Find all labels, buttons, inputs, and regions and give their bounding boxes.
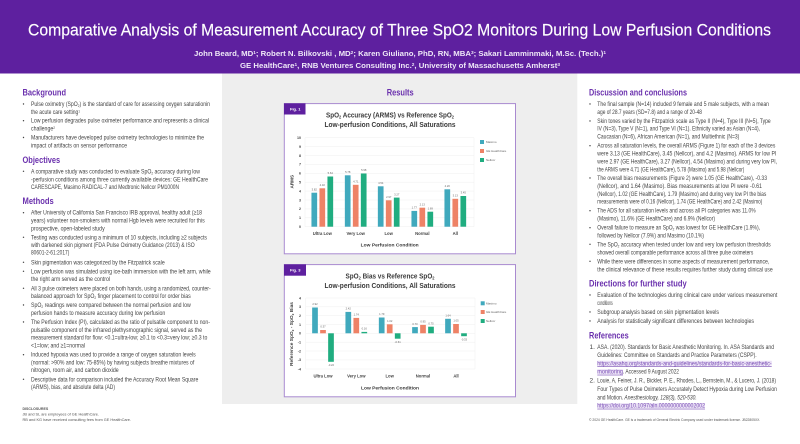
affiliations: , University of Massachusetts Amherst <box>414 61 558 70</box>
bar chart: ARMS: 1 <box>299 216 301 220</box>
bar chart: ARMS: Very Low <box>347 231 366 236</box>
bar chart: ARMS: 5.98 <box>361 168 367 172</box>
bar chart: bias: 0 <box>299 332 301 336</box>
heading: discussion and conclusions: Discussion and conclusions <box>589 87 687 97</box>
bar chart: bias: Bias <box>289 302 294 314</box>
bar chart: bias: 1.74 <box>354 313 359 317</box>
chart title <box>324 110 456 129</box>
bar chart: bias: -3 <box>298 358 301 362</box>
text block: methods bullets: All 3 pulse oximeters were placed on both hands, using a randomized, counter- <box>31 285 211 292</box>
text block: directions bullets: Subgroup analysis based on skin pigmentation levels <box>597 309 720 316</box>
chart title: Bias vs Reference SpO <box>361 272 433 281</box>
bar chart: ARMS: 4.32 <box>320 183 325 187</box>
bar chart: bias: 1.79 <box>379 312 385 316</box>
text block: methods bullets: finger placement to control for order bias <box>96 293 191 300</box>
affiliations: , RNB Ventures Consulting Inc. <box>297 61 412 70</box>
text block: methods bullets: the right arm served as the control <box>31 276 110 283</box>
text block: methods bullets: years) volunteer non-smokers with normal Hgb levels were recruited for this <box>31 218 205 225</box>
text block: objectives bullet <box>23 168 208 191</box>
bar chart: ARMS: 0 <box>299 225 301 229</box>
bar chart: bias: Ultra Low <box>313 374 333 378</box>
bar chart: ARMS: 2 <box>299 207 301 211</box>
authors: ; Robert N. Bilkovski , MD <box>256 49 351 58</box>
bar chart: bias: 1 <box>299 323 301 327</box>
bar chart: ARMS: Low Perfusion Condition <box>361 243 419 248</box>
text block: objectives bullet: CARESCAPE, Masimo RADICAL-7 and Medtronic Nellcor PM1000N <box>31 184 179 191</box>
bar chart: bias: 1.64 <box>445 314 451 318</box>
text block: discussion bullets: Caucasian (N=6), African American (N=1), and Multiethnic (N=3) <box>597 134 739 141</box>
text block: discussion bullets: The ADS for all saturation levels and across all PI categories was 11.0% <box>597 208 756 215</box>
chart title: SpO <box>326 110 341 119</box>
text block: background bullets: 2 <box>53 125 56 130</box>
text block: methods bullets: Induced hypoxia was used to provide a range of oxygen saturation levels <box>31 352 196 359</box>
text block: background bullets: 1 <box>78 108 81 114</box>
disclosures <box>22 407 131 422</box>
figure tag 3: Fig. 3 <box>290 267 301 272</box>
heading: references: References <box>589 330 629 340</box>
bar chart: ARMS: 5.78 <box>345 170 351 174</box>
text block: methods bullets: SpO <box>31 302 44 309</box>
bar chart: bias: - SpO <box>289 315 294 330</box>
bar chart: ARMS: 2.97 <box>386 195 392 199</box>
bar chart: bias: All <box>453 374 459 378</box>
bar chart: ARMS: Normal <box>415 231 430 236</box>
chart legend <box>481 301 507 323</box>
text block: background bullets: Pulse oximetry (SpO <box>31 101 91 108</box>
text block: discussion bullets: was lowest for GE HealthCare (1.9%), <box>674 225 760 232</box>
panel: figure 3 bias chart card <box>284 264 516 397</box>
bar chart: bias: -1 <box>298 340 301 344</box>
bar chart: bias: 0.75 <box>428 321 434 325</box>
panel: references <box>589 330 777 410</box>
text block: reference list: . Accessed 9 August 2022 <box>623 369 679 376</box>
chart title: 2 <box>339 114 342 119</box>
text block: objectives bullet: 2 <box>151 170 154 175</box>
affiliations: GE HealthCare <box>240 61 292 70</box>
text block: methods bullets: The Perfusion Index (PI), calculated as the ratio of pulsatile component to non- <box>31 319 210 326</box>
chart title: 2 <box>452 114 454 119</box>
bar chart: bias: 1.05 <box>453 319 459 323</box>
text block: reference list <box>590 344 777 410</box>
bar chart: bias: Very Low <box>347 374 366 378</box>
text block: discussion bullets: (Nellcor), and 1.64 (Masimo). Bias measurements at low PI were -0.61 <box>597 183 762 190</box>
figure tag 3 <box>284 264 306 276</box>
bar chart: ARMS: 4 <box>299 189 301 193</box>
bar chart: ARMS: 1.77 <box>412 206 417 210</box>
text block: methods bullets: 2 <box>94 295 97 300</box>
grey results panel <box>222 73 577 404</box>
bar chart: ARMS: Ultra Low <box>313 231 333 236</box>
text block: discussion bullets: 2 <box>673 227 675 232</box>
bar chart: bias: 2.42 <box>346 307 351 311</box>
bar chart: ARMS: All <box>453 231 458 236</box>
text block: background bullets: 2 <box>78 103 80 108</box>
bar chart: ARMS: 4.20 <box>445 184 450 188</box>
text block: background bullets: impact of artifacts on sensor performance <box>31 142 127 150</box>
text block: methods bullets: (ARMS), bias, and absolute delta (AD) <box>31 384 115 391</box>
authors: 1 <box>253 50 256 55</box>
panel: figure 1 ARMS chart card <box>284 103 516 254</box>
text block: discussion bullets: followed by Nellcor (7.9%) and Masimo (10.1%) <box>597 232 704 239</box>
bar chart: bias: 1.02 <box>387 319 393 323</box>
text block: methods bullets: <1=low; and ≥1=normal <box>31 343 85 350</box>
panel: directions for further study <box>589 279 777 325</box>
bar chart: ARMS <box>290 136 474 248</box>
bar chart: bias: -0.33 <box>461 338 468 342</box>
authors: ; Karen Giuliano, PhD, RN, MBA <box>353 49 472 58</box>
text block: methods bullets: Skin pigmentation was categorized by the Fitzpatrick scale <box>31 259 165 266</box>
text block: methods bullets: 80601-2-61:2017) <box>31 250 69 257</box>
affiliations: 2 <box>412 62 415 67</box>
text block: discussion bullets: the ARMS were 4.71 (GE HealthCare), 5.78 (Masimo) and 5.98 (Nellcor) <box>597 166 744 173</box>
panel: discussion and conclusions <box>589 87 777 273</box>
text block: methods bullets: After University of California San Francisco IRB approval, healthy adult (≥18 <box>31 210 202 217</box>
bar chart: ARMS: ARMS <box>290 175 295 188</box>
bar chart: ARMS: 6 <box>299 172 301 176</box>
bar chart: bias: 2 <box>291 329 295 331</box>
bar chart: ARMS: 9 <box>299 145 301 149</box>
text block: methods bullets: Testing was conducted using a minimum of 10 subjects, including ≥2 subjects <box>31 234 208 241</box>
text block: methods bullets: 2 <box>41 304 44 309</box>
text block: methods bullets: readings were compared between the normal perfusion and low <box>43 302 191 309</box>
bar chart: ARMS: 7 <box>299 163 301 167</box>
text block: methods bullets: (normal: >90% and low: 75-85%) by having subjects breathe mixtures of <box>31 359 194 366</box>
text block: discussion bullets: (Masimo), 11.6% (GE HealthCare) and 6.9% (Nellcor) <box>597 216 715 223</box>
text block: background bullets: challenge <box>31 126 59 132</box>
bar chart: ARMS: 1.69 <box>428 206 433 210</box>
text block: methods bullets: Low perfusion was simulated using ice-bath immersion with the left arm, while <box>31 268 211 275</box>
bar chart: bias: 3 <box>299 305 301 309</box>
bar chart: ARMS: 4.71 <box>353 180 359 184</box>
chart title: 2 <box>432 276 435 281</box>
text block: methods bullets: perfusion hands to measure accuracy during low perfusion <box>31 310 166 317</box>
text block: discussion bullets: Overall failure to measure an SpO <box>597 225 696 232</box>
text block: reference list: 1. <box>590 344 595 351</box>
bar chart: bias: Low <box>386 374 395 378</box>
bar chart: bias: -3.22 <box>328 363 335 367</box>
text block: background bullets: Low perfusion degrades pulse oximeter performance and represents a clinical <box>31 118 209 125</box>
chart legend: Nellcor <box>486 158 495 162</box>
bar chart: bias: 2 <box>299 314 301 318</box>
text block: methods bullets: Descriptive data for comparison included the Accuracy Root Mean Square <box>31 376 199 383</box>
bar chart: bias: Reference SpO <box>289 333 294 366</box>
text block: methods bullets: pulsatile component of the infrared plethysmographic signal, served as the <box>31 327 202 334</box>
heading: objectives: Objectives <box>22 155 60 165</box>
text block: background bullets: the acute care setting <box>31 109 93 116</box>
panel: methods <box>22 196 211 391</box>
bar chart: ARMS: 3.82 <box>312 187 317 191</box>
text block: directions bullets <box>589 292 777 325</box>
bar chart: bias: -2 <box>298 349 301 353</box>
authors: 1 <box>603 50 607 55</box>
panel: background <box>22 88 210 150</box>
bar chart: bias: Low Perfusion Condition <box>361 386 419 391</box>
text block: objectives bullet: -perfusion conditions among three currently available devices: GE HealthCare <box>31 176 208 183</box>
bar chart: ARMS: 3.13 <box>453 194 458 198</box>
text block: objectives bullet: A comparative study was conducted to evaluate SpO <box>31 168 183 175</box>
text block: background bullets: ) is the standard of care for assessing oxygen saturationin <box>79 101 210 108</box>
heading: results: Results <box>387 87 414 97</box>
text block: reference list: 2. <box>590 378 595 385</box>
bar chart: ARMS: Low <box>385 231 394 236</box>
text block: directions bullets: Analysis for statistically significant differences between technologies <box>597 318 755 325</box>
header banner <box>0 0 800 74</box>
text block: reference list: https://doi.org/10.1097/aln.0000000000002002 <box>597 403 705 410</box>
chart legend <box>480 140 507 162</box>
chart title: Low-perfusion Conditions, All Saturations <box>324 120 456 129</box>
affiliations: 3 <box>557 62 561 67</box>
chart title <box>324 272 456 290</box>
text block: methods bullets: nitrogen, room air, and carbon dioxide <box>31 367 119 374</box>
chart title: 2 <box>359 276 361 281</box>
chart title: Low-perfusion Conditions, All Saturations <box>324 281 456 290</box>
bar chart: ARMS: 3.45 <box>461 191 466 195</box>
figure tag 1: Fig. 1 <box>290 106 301 111</box>
text block: methods bullets: measurement standard for flow: <0.1=ultra-low; ≥0.1 to <0.3=very low; ≥0.3 to <box>31 335 208 342</box>
text block: background bullets: Manufacturers have developed pulse oximetry technologies to minimize the <box>31 134 204 142</box>
chart title: Accuracy (ARMS) vs Reference SpO <box>341 110 452 119</box>
text block: objectives bullet: accuracy during low <box>153 168 200 175</box>
bar chart: ARMS: 3 <box>299 198 301 202</box>
authors: John Beard, MD <box>194 49 250 58</box>
text block: reference list: monitoring <box>597 369 623 376</box>
text block: reference list: Guidelines: Committee on Standards and Practice Parameters (CSPP). <box>597 352 757 359</box>
heading: directions for further study: Directions for further study <box>589 279 687 289</box>
bar chart: bias: 4 <box>299 296 301 300</box>
bar chart: ARMS: 4.54 <box>378 181 384 185</box>
bar chart: bias: -0.61 <box>395 340 401 344</box>
bar chart: ARMS: 5.64 <box>328 171 333 175</box>
bar chart: bias: 0.95 <box>420 320 426 324</box>
chart title: SpO <box>346 272 360 281</box>
text block: background bullets <box>23 101 210 150</box>
chart legend: Masimo <box>486 301 497 305</box>
text block: discussion bullets: 2 <box>618 243 620 248</box>
bar chart: bias: -4 <box>298 367 301 371</box>
copyright note: © 2024 GE HealthCare. GE is a trademark of General Electric Company used under trademark license. JB22805XX. <box>589 418 760 422</box>
text block: directions bullets: conditions <box>597 300 613 307</box>
bar chart: bias: 2.92 <box>312 302 318 306</box>
text block: methods bullets: balanced approach for SpO <box>31 293 110 300</box>
bar chart: ARMS: 2.13 <box>420 202 425 206</box>
disclosures: JB and SL are employees of GE HealthCare. <box>22 412 99 416</box>
bar chart: ARMS: 8 <box>299 154 301 158</box>
disclosures: DISCLOSURES <box>22 407 49 411</box>
text block: discussion bullets: age of 28.7 years (SD=7.8) and a range of 20-48 <box>597 109 702 116</box>
affiliations: 1 <box>295 62 298 67</box>
text block: methods bullets: prospective, open-labeled study <box>31 225 105 232</box>
bar chart: bias: Normal <box>416 374 430 378</box>
text block: methods bullets <box>23 210 211 391</box>
bar chart: bias: 0.70 <box>412 322 418 326</box>
panel: objectives <box>22 155 208 191</box>
bar chart: bias: 0.37 <box>320 325 326 329</box>
chart legend: GE HealthCare <box>486 149 507 153</box>
chart legend: GE HealthCare <box>486 310 507 314</box>
bar chart: bias: 2 <box>291 313 295 315</box>
bar chart: ARMS: 3.27 <box>394 192 400 196</box>
authors: 3 <box>471 50 474 55</box>
authors: 2 <box>351 50 354 55</box>
heading: background: Background <box>22 88 66 98</box>
text block: discussion bullets: The SpO <box>597 241 623 248</box>
figure tag 1 <box>284 103 306 114</box>
text block: reference list: and Motion. Anesthesiology, 128(3), 520-530. <box>597 394 697 401</box>
disclosures: RB and KG have received consulting fees from GE HealthCare. <box>22 418 131 422</box>
chart legend: Nellcor <box>486 319 495 323</box>
authors: ; Sakari Lamminmaki, M.Sc. (Tech.) <box>474 49 604 58</box>
bar chart: ARMS: 10 <box>297 136 301 140</box>
bar chart: bias <box>289 296 475 391</box>
bar chart: ARMS: 5 <box>299 180 301 184</box>
heading: methods: Methods <box>22 196 54 206</box>
chart legend: Masimo <box>486 140 497 144</box>
text block: discussion bullets <box>589 101 777 273</box>
text block: methods bullets: with darkened skin pigment (FDA Pulse Oximetry Guidance (2013) & ISO <box>30 242 195 249</box>
bar chart: bias: 0.16 <box>362 327 367 331</box>
